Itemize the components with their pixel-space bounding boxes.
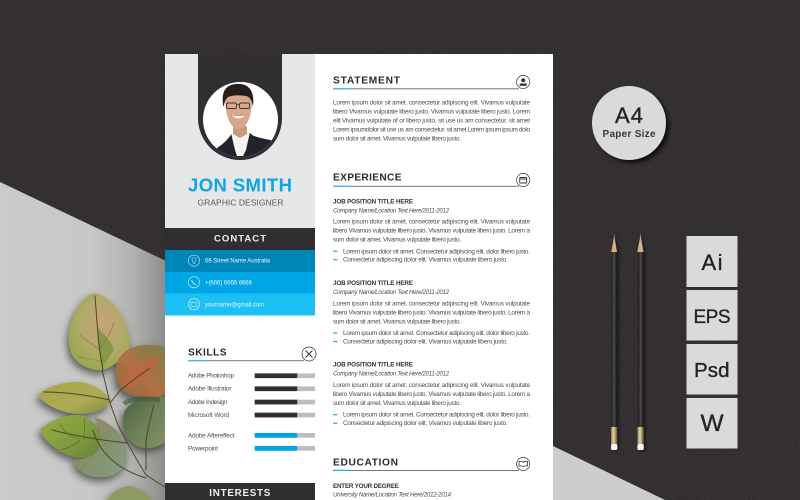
format badge: EPS: EPS bbox=[694, 307, 730, 328]
icon: open book bbox=[517, 457, 530, 471]
job entry 1: Lorem ipsum dolor sit amet. consectetur adipiscing elit. Vivamus vulputate bbox=[333, 219, 530, 226]
statement underline bbox=[333, 88, 519, 89]
degree entry bbox=[333, 483, 452, 499]
header panel bbox=[165, 54, 315, 228]
job entry 2: sum dolor sit amet. Vivamus vulputate libero justo. bbox=[333, 318, 461, 325]
statement heading: STATEMENT bbox=[333, 76, 401, 86]
pencil 1 bbox=[611, 233, 617, 450]
job entry 2: JOB POSITION TITLE HERE bbox=[333, 280, 413, 287]
resume page bbox=[165, 54, 553, 500]
skills section bbox=[188, 347, 316, 452]
job entry 1 bbox=[333, 198, 530, 264]
job entry 1: Consectetur adipiscing dolor elit. Vivamus vulputate libero justo. bbox=[343, 257, 508, 264]
right column bbox=[333, 75, 530, 499]
statement section bbox=[333, 75, 530, 143]
left column bbox=[165, 54, 316, 500]
job entry 3: sum dolor sit amet. Vivamus vulputate libero justo. bbox=[333, 400, 461, 407]
job entry 1: Company Name/Location Text Here/2011-2012 bbox=[333, 207, 450, 214]
contact row: phone bbox=[165, 272, 315, 294]
statement body text bbox=[333, 100, 530, 143]
light grey diagonal background bbox=[0, 182, 165, 500]
job entry 3: JOB POSITION TITLE HERE bbox=[333, 362, 413, 369]
A4 paper size badge bbox=[592, 86, 666, 160]
skills heading: SKILLS bbox=[188, 347, 227, 358]
statement body text: libero Vivamus vulputate libero justo. Vivamus vulputate libero justo. Lorem bbox=[333, 109, 530, 116]
job entry 2: Company Name/Location Text Here/2011-2012 bbox=[333, 289, 450, 296]
format badge: EPS bbox=[686, 290, 738, 340]
job entry 2: Consectetur adipiscing dolor elit. Vivamus vulputate libero justo. bbox=[343, 338, 508, 345]
job entry 1: JOB POSITION TITLE HERE bbox=[333, 198, 413, 205]
job entry 3: Lorem ipsum dolor sit amet. consectetur adipiscing elit. Vivamus vulputate bbox=[333, 382, 530, 389]
light grey corner at lower right bbox=[553, 446, 665, 500]
format badge: Ai bbox=[686, 236, 738, 287]
contact row: email: yourname@gmail.com bbox=[205, 301, 264, 308]
skills underline bbox=[188, 360, 304, 361]
interests heading bar: INTERESTS bbox=[209, 488, 271, 499]
job entry 3: Lorem ipsum dolor sit amet. Consectetur adipiscing elit. dolor libero justo. bbox=[343, 412, 530, 419]
format badge: W: W bbox=[700, 410, 724, 437]
job entry 3: libero Vivamus vulputate libero justo. Vivamus vulputate libero justo. Lorem a bbox=[333, 391, 530, 398]
statement body text: elit Vivamus vulputate of or libero justo. sit use us am consectetur. sit amet bbox=[333, 118, 530, 125]
dark photo tab bbox=[198, 54, 282, 160]
icon: person bbox=[517, 75, 530, 89]
skill: Adobe Photoshop: Adobe Photoshop bbox=[188, 373, 234, 380]
pencil 2 bbox=[637, 233, 644, 450]
degree entry: University Name/Location Text Here/2012-2014 bbox=[333, 492, 452, 499]
experience section bbox=[333, 173, 530, 427]
job entry 3 bbox=[333, 362, 530, 427]
contact heading bar: CONTACT bbox=[214, 234, 266, 245]
portrait photo bbox=[203, 82, 278, 157]
format badge: Ai: Ai bbox=[702, 250, 722, 275]
statement body text: sum dolor sit amet. Vivamus vulputate libero justo. bbox=[333, 136, 461, 143]
education section bbox=[333, 457, 530, 499]
contact row: email bbox=[165, 294, 315, 316]
A4 paper size badge: Paper Size bbox=[602, 129, 656, 140]
name: JON SMITH bbox=[188, 175, 292, 196]
education heading: EDUCATION bbox=[333, 458, 398, 468]
skill: Adobe Indesign: Adobe Indesign bbox=[188, 399, 228, 406]
skill: Adobe Illustrator: Adobe Illustrator bbox=[188, 386, 232, 393]
interests heading bar bbox=[165, 483, 315, 500]
watercolour leaf branch bbox=[38, 293, 170, 500]
skill: Adobe Aftereffect: Adobe Aftereffect bbox=[188, 432, 235, 439]
contact heading bar bbox=[165, 228, 315, 250]
job entry 1: Lorem ipsum dolor sit amet. Consectetur adipiscing elit. dolor libero justo. bbox=[343, 248, 530, 255]
degree entry: ENTER YOUR DEGREE bbox=[333, 483, 399, 490]
skill: Microsoft Word: Microsoft Word bbox=[188, 412, 229, 419]
format badge: Psd: Psd bbox=[694, 359, 730, 382]
icon: skills network bbox=[302, 347, 316, 361]
job entry 1: sum dolor sit amet. Vivamus vulputate libero justo. bbox=[333, 237, 461, 244]
format badge: Psd bbox=[686, 344, 738, 394]
format badge: W bbox=[686, 398, 738, 448]
page background bbox=[165, 54, 553, 500]
job title: GRAPHIC DESIGNER bbox=[198, 198, 284, 208]
job entry 3: Company Name/Location Text Here/2011-2012 bbox=[333, 371, 450, 378]
job entry 3: Consectetur adipiscing dolor elit. Vivamus vulputate libero justo. bbox=[343, 420, 508, 427]
experience underline bbox=[333, 186, 519, 187]
statement body text: Lorem ipsum dolor sit amet. consectetur adipiscing elit. Vivamus vulputate bbox=[333, 100, 530, 107]
contact row: address bbox=[165, 250, 315, 272]
statement body text: Lorem ipsumdolor sit use us am consectetur. sit amet Lorem ipsum ipsum dolo bbox=[333, 127, 530, 134]
icon: briefcase bbox=[517, 173, 530, 187]
contact row: phone: +(666) 6666 6666 bbox=[205, 279, 253, 286]
job entry 2: libero Vivamus vulputate libero justo. Vivamus vulputate libero justo. Lorem a bbox=[333, 309, 530, 316]
skill: Powerpoint: Powerpoint bbox=[188, 445, 218, 452]
job entry 2 bbox=[333, 280, 530, 345]
job entry 2: Lorem ipsum dolor sit amet. consectetur adipiscing elit. Vivamus vulputate bbox=[333, 300, 530, 307]
contact row: address: 66 Street Name Australia bbox=[205, 258, 271, 265]
job entry 2: Lorem ipsum dolor sit amet. Consectetur adipiscing elit. dolor libero justo. bbox=[343, 330, 530, 337]
experience heading: EXPERIENCE bbox=[333, 173, 402, 184]
A4 paper size badge: A4 bbox=[615, 103, 643, 128]
education underline bbox=[333, 470, 519, 471]
job entry 1: libero Vivamus vulputate libero justo. Vivamus vulputate libero justo. Lorem a bbox=[333, 228, 530, 235]
